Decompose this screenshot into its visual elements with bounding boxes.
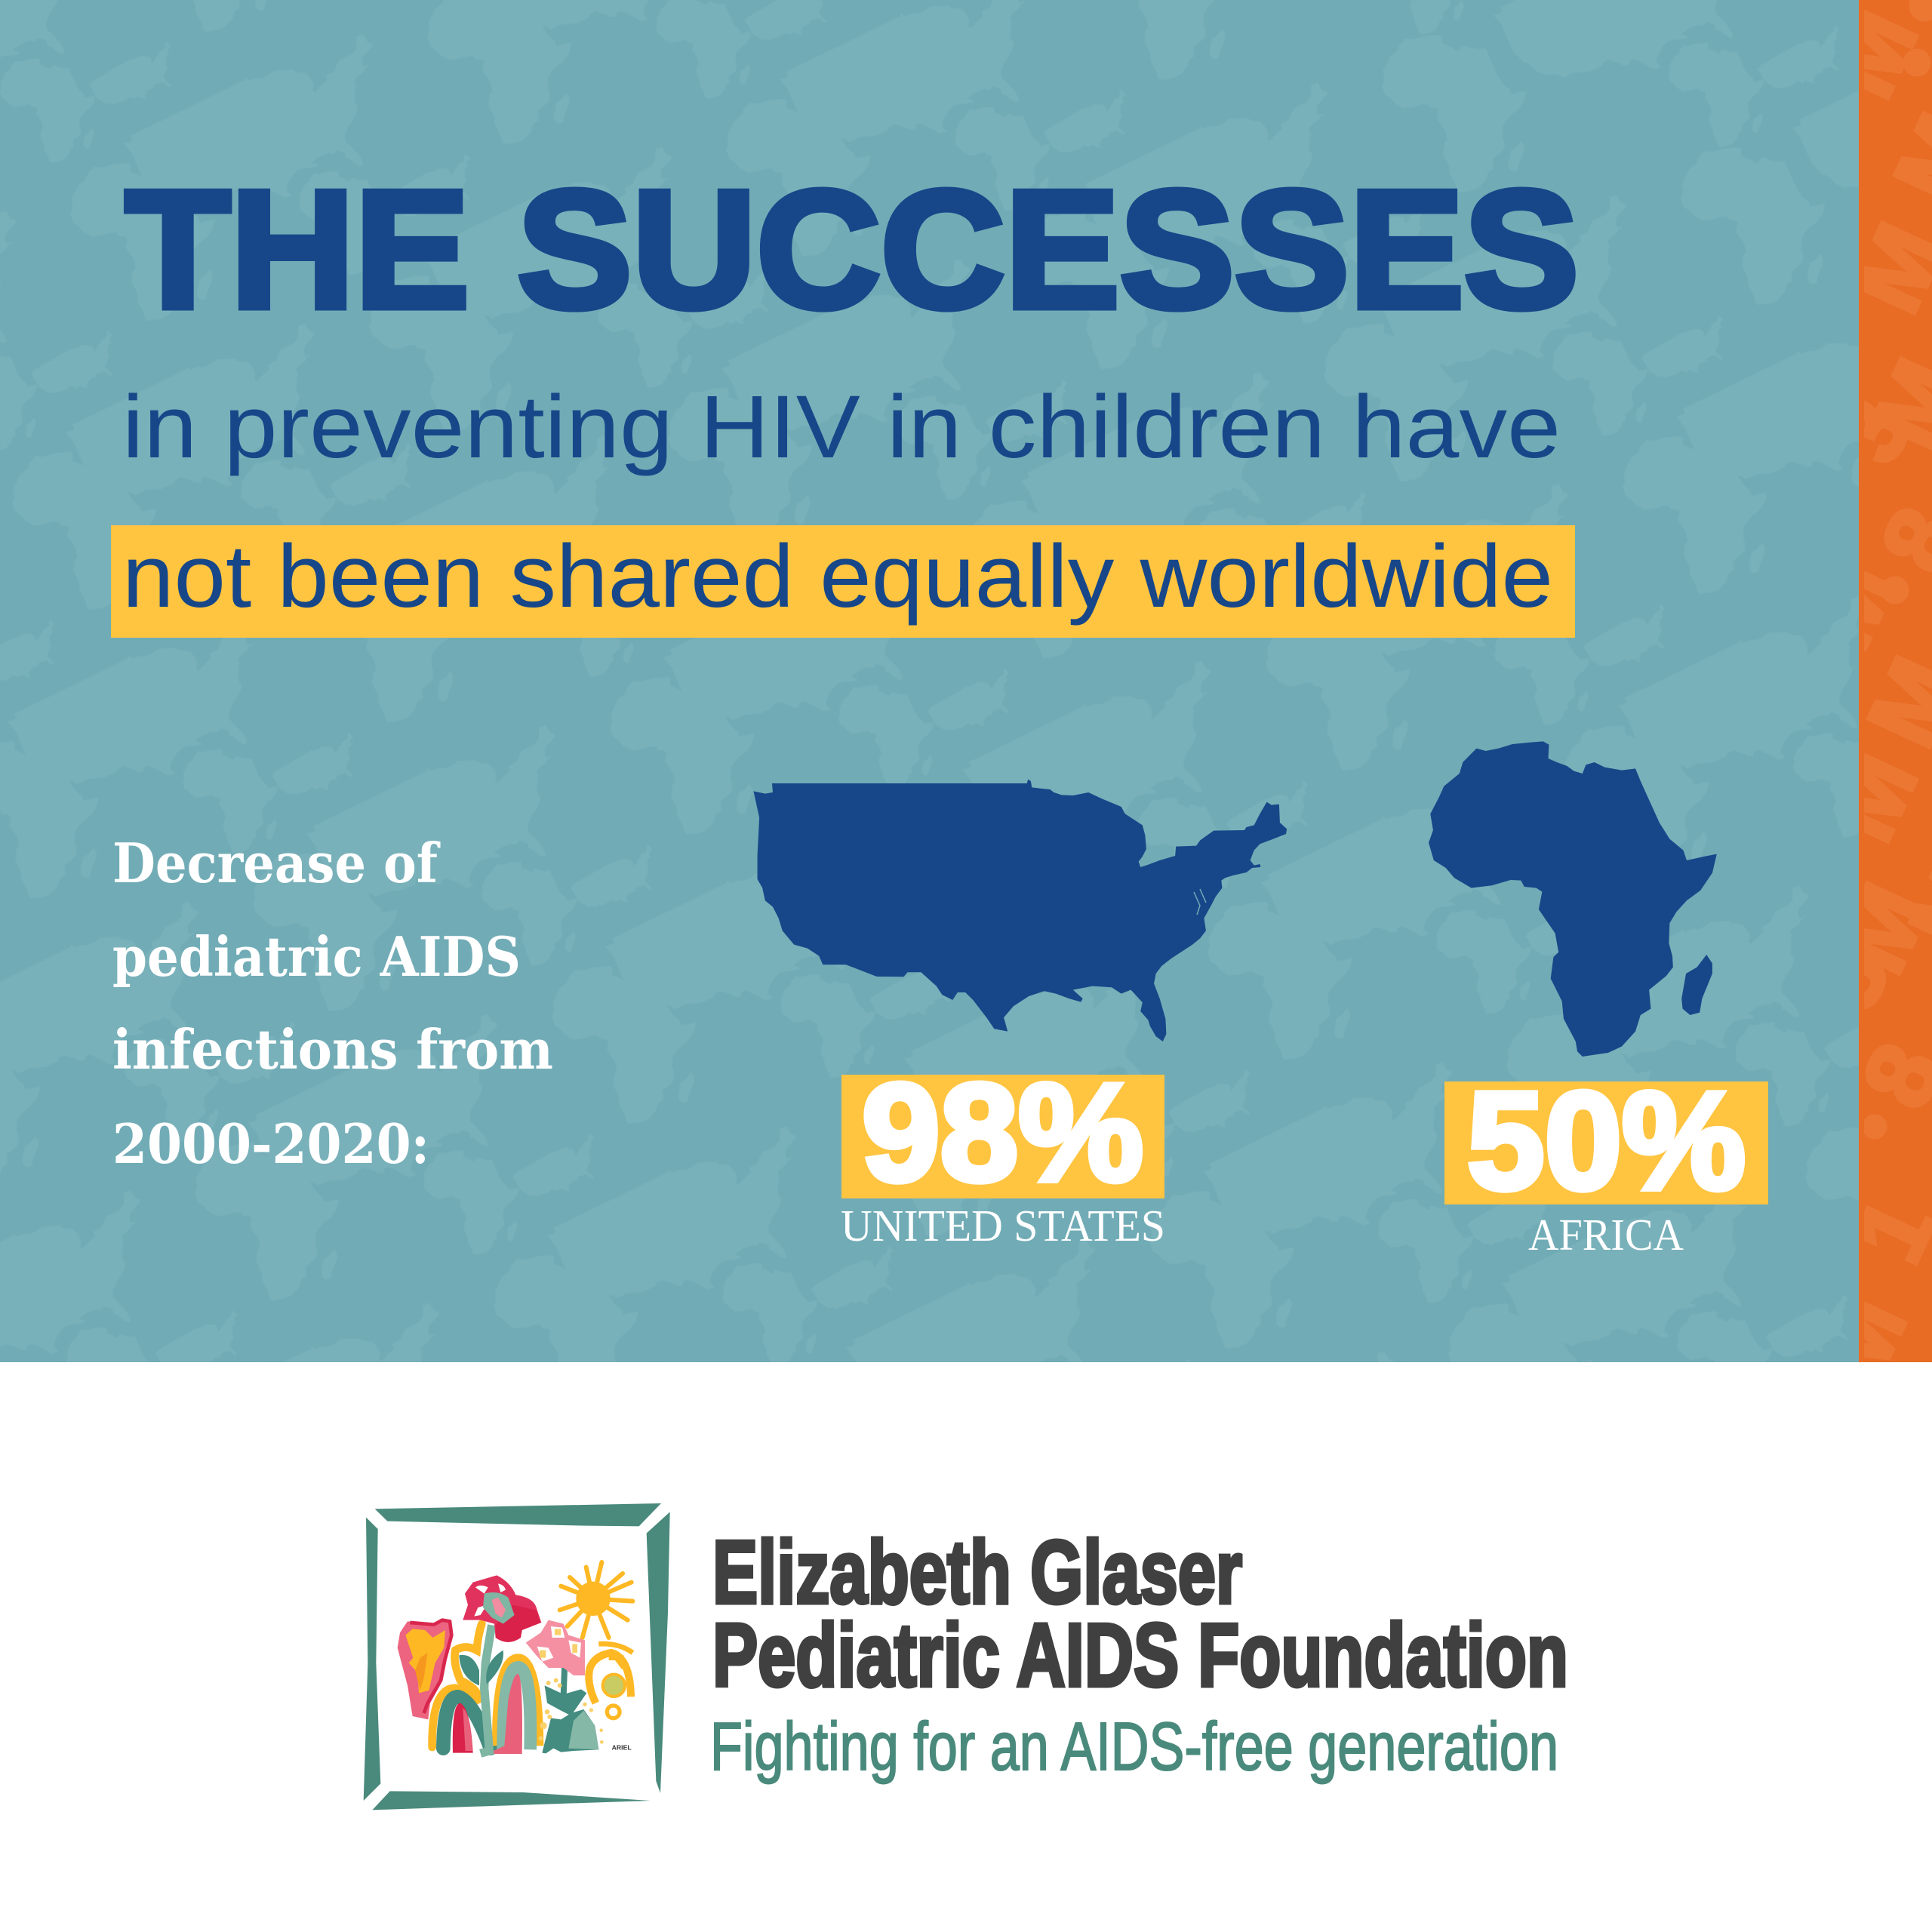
highlighted subtitle: not been shared equally worldwide (122, 527, 1553, 626)
title: THE SUCCESSES (125, 156, 1579, 343)
stat: 98% United States: UNITED STATES (841, 1201, 1165, 1251)
text block: decrease of pediatric AIDS infections: 2000-2020: (112, 1112, 429, 1176)
stat: 50% Africa (1444, 1063, 1768, 1260)
logo text: organisation name (712, 1522, 1568, 1706)
text block: decrease of pediatric AIDS infections (112, 831, 553, 1176)
map: United States (753, 780, 1287, 1041)
painting: dots and signature (539, 1678, 632, 1752)
painting: tulip (398, 1619, 453, 1719)
subtitle line: in preventing HIV in children have (122, 377, 1561, 477)
painting: dots and signature: ARIEL (612, 1744, 632, 1752)
text block: decrease of pediatric AIDS infections: Decrease of (112, 831, 441, 895)
logo text: organisation name: Pediatric AIDS Foundation (712, 1605, 1568, 1706)
panel: teal background with map pattern (0, 0, 1859, 1362)
logo frame (364, 1503, 670, 1810)
logo text: organisation name: Elizabeth Glaser (712, 1522, 1242, 1623)
text block: decrease of pediatric AIDS infections: pediatric AIDS (112, 924, 521, 989)
text block: decrease of pediatric AIDS infections: infections from (112, 1017, 553, 1081)
stat: 50% Africa: AFRICA (1528, 1210, 1684, 1260)
map: Africa (1429, 741, 1717, 1057)
painting: red flower (459, 1575, 541, 1753)
stat: 50% Africa: 50% (1467, 1063, 1746, 1218)
painting: yellow flower (589, 1644, 632, 1718)
painting: pink flower (526, 1620, 598, 1753)
painting: centre arch (487, 1658, 540, 1754)
logo text: tagline: Fighting for an AIDS-free generation (710, 1709, 1558, 1785)
logo: framed child's painting (364, 1503, 670, 1810)
stat: 98% United States (841, 1054, 1165, 1251)
painting: left arch (432, 1624, 491, 1753)
stat: 98% United States: 98% (862, 1054, 1143, 1210)
panel: orange side strip with faded numerals (1859, 0, 1932, 1362)
painting: sun (560, 1562, 632, 1638)
